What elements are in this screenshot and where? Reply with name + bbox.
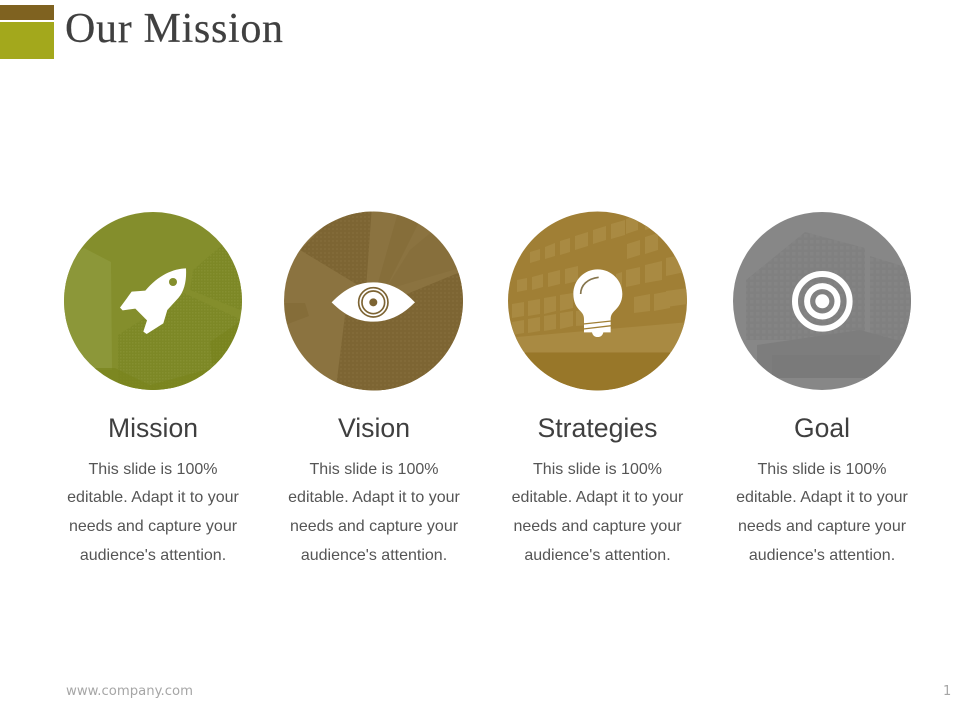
body text: strategies: audience's attention. [524,547,671,564]
body text: vision [288,461,461,564]
image circle: vision [284,205,470,395]
body text: strategies: editable. Adapt it to your [512,489,684,506]
heading: Mission: Mission [108,413,198,443]
body text: strategies: This slide is 100% [533,461,662,478]
body text: goal [736,461,909,564]
body text: goal: audience's attention. [749,547,895,564]
body text: strategies [512,461,684,564]
body text: vision: needs and capture your [290,518,459,535]
image circle: goal [733,212,915,390]
body text: mission: editable. Adapt it to your [67,489,240,506]
panel: mission [64,212,245,564]
body text: mission: needs and capture your [69,518,238,535]
image circle: strategies [505,207,690,395]
heading: Goal: Goal [794,413,850,443]
body text: strategies: needs and capture your [513,518,682,535]
body text: mission: audience's attention. [80,547,226,564]
title: Our Mission [65,6,283,52]
body text: goal: This slide is 100% [758,461,886,478]
icon: eye [332,282,415,322]
heading: Vision: Vision [338,413,410,443]
body text: vision: editable. Adapt it to your [288,489,461,506]
image circle: mission [64,212,245,395]
body text: goal: editable. Adapt it to your [736,489,909,506]
body text: mission: This slide is 100% [89,461,217,478]
icon: target [795,274,850,329]
panel: vision [284,205,470,564]
panel: goal [733,212,915,564]
icon: light bulb [573,269,622,337]
panel: strategies [505,207,690,564]
footer url: www.company.com [66,684,193,699]
body text: vision: This slide is 100% [310,461,438,478]
body text: vision: audience's attention. [301,547,447,564]
icon: rocket [120,268,186,334]
page number: 1 [943,684,951,699]
heading: Strategies: Strategies [538,413,658,443]
header accent block [0,5,54,59]
body text: goal: needs and capture your [738,518,907,535]
body text: mission [67,461,240,564]
